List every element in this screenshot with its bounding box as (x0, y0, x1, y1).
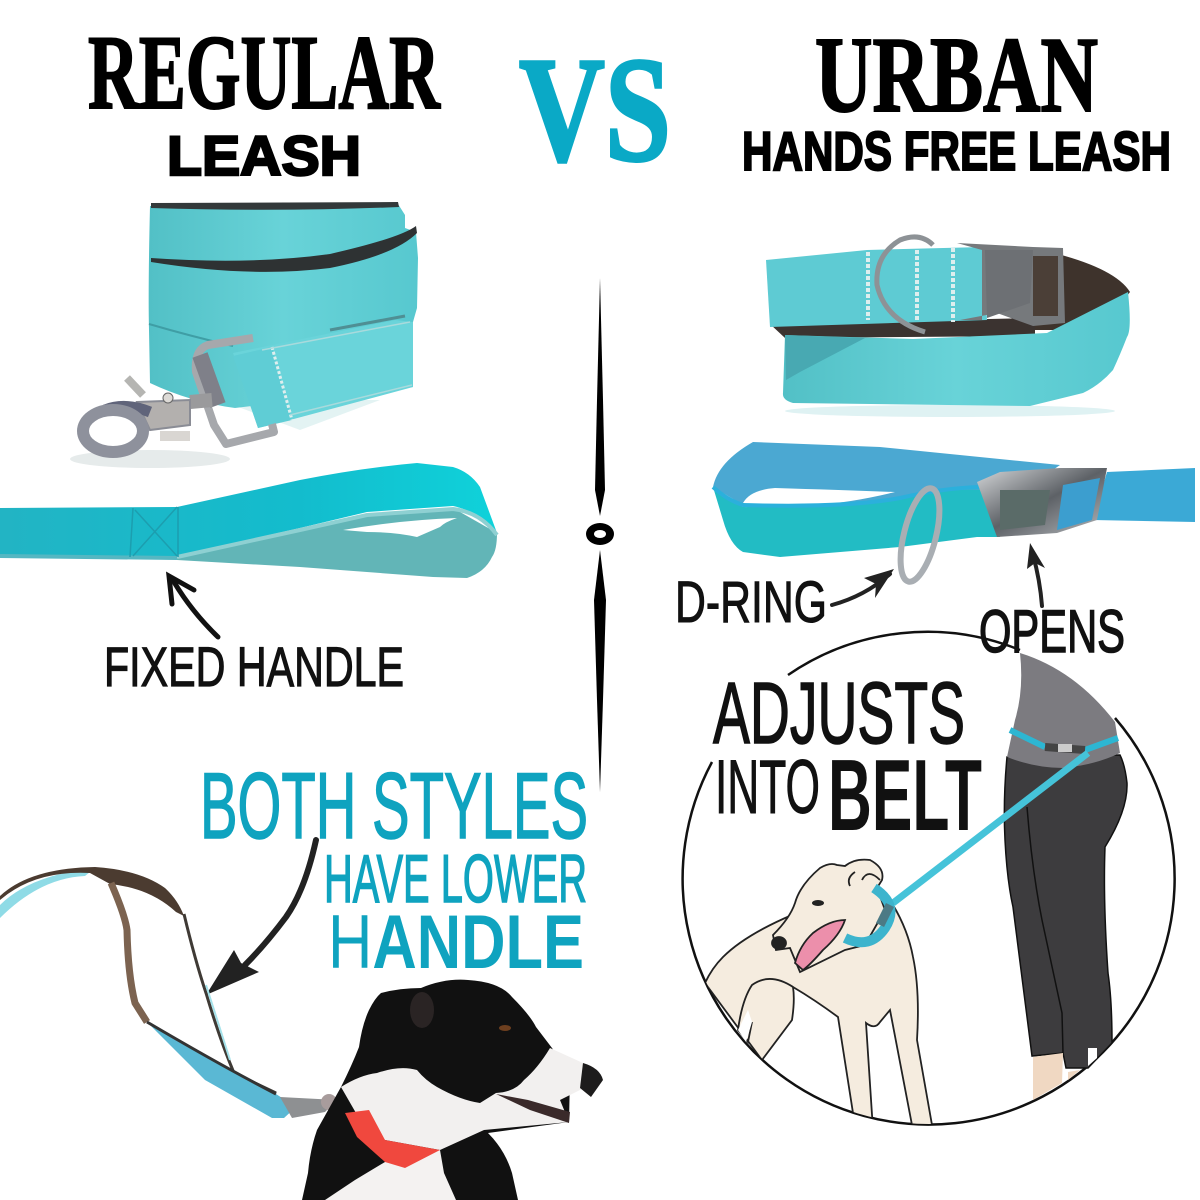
label: adjusts into belt: BELT (828, 740, 982, 852)
title: regular leash: LEASH (167, 124, 361, 187)
person torso (1007, 653, 1120, 768)
photo: metal snap clip (83, 338, 274, 452)
callout: both styles have lower handle: HANDLE (328, 900, 584, 985)
photo: urban collar belt (766, 237, 1130, 417)
photo: urban handle with buckle (713, 442, 1195, 585)
label: opens with arrow: OPENS (979, 598, 1125, 665)
label: fixed handle: FIXED HANDLE (104, 635, 404, 698)
person skin (1033, 1053, 1080, 1100)
dog (705, 860, 932, 1130)
tether (893, 753, 1088, 903)
circle outline arcs (683, 632, 1175, 1125)
callout: both styles have lower handle: BOTH STYLES (200, 753, 588, 858)
label: d-ring with arrow: D-RING (675, 570, 827, 635)
photo: coiled regular leash (70, 202, 418, 468)
photo: regular leash fixed handle (0, 463, 497, 578)
photo: lower handle leash (0, 867, 337, 1118)
arrow: to lower handle (206, 840, 316, 995)
photo: border collie dog (302, 980, 603, 1200)
label: adjusts into belt: ADJUSTS (713, 665, 965, 762)
callout: both styles have lower handle (200, 753, 588, 985)
title: regular leash (88, 14, 441, 187)
arrow: to fixed handle (169, 576, 218, 637)
title: regular leash: REGULAR (88, 14, 441, 131)
person legs (1004, 755, 1127, 1068)
title: vs: VS (519, 27, 671, 193)
illustration circle: person and dog (683, 632, 1175, 1130)
title: urban hands free leash (742, 16, 1171, 182)
callout: both styles have lower handle: HAVE LOWER (324, 841, 587, 917)
label: adjusts into belt (713, 665, 982, 852)
belt (1010, 730, 1118, 750)
title: urban hands free leash: URBAN (815, 16, 1098, 135)
label: adjusts into belt: INTO (715, 745, 820, 830)
label: opens with arrow (979, 543, 1125, 665)
divider ornament (586, 278, 614, 792)
